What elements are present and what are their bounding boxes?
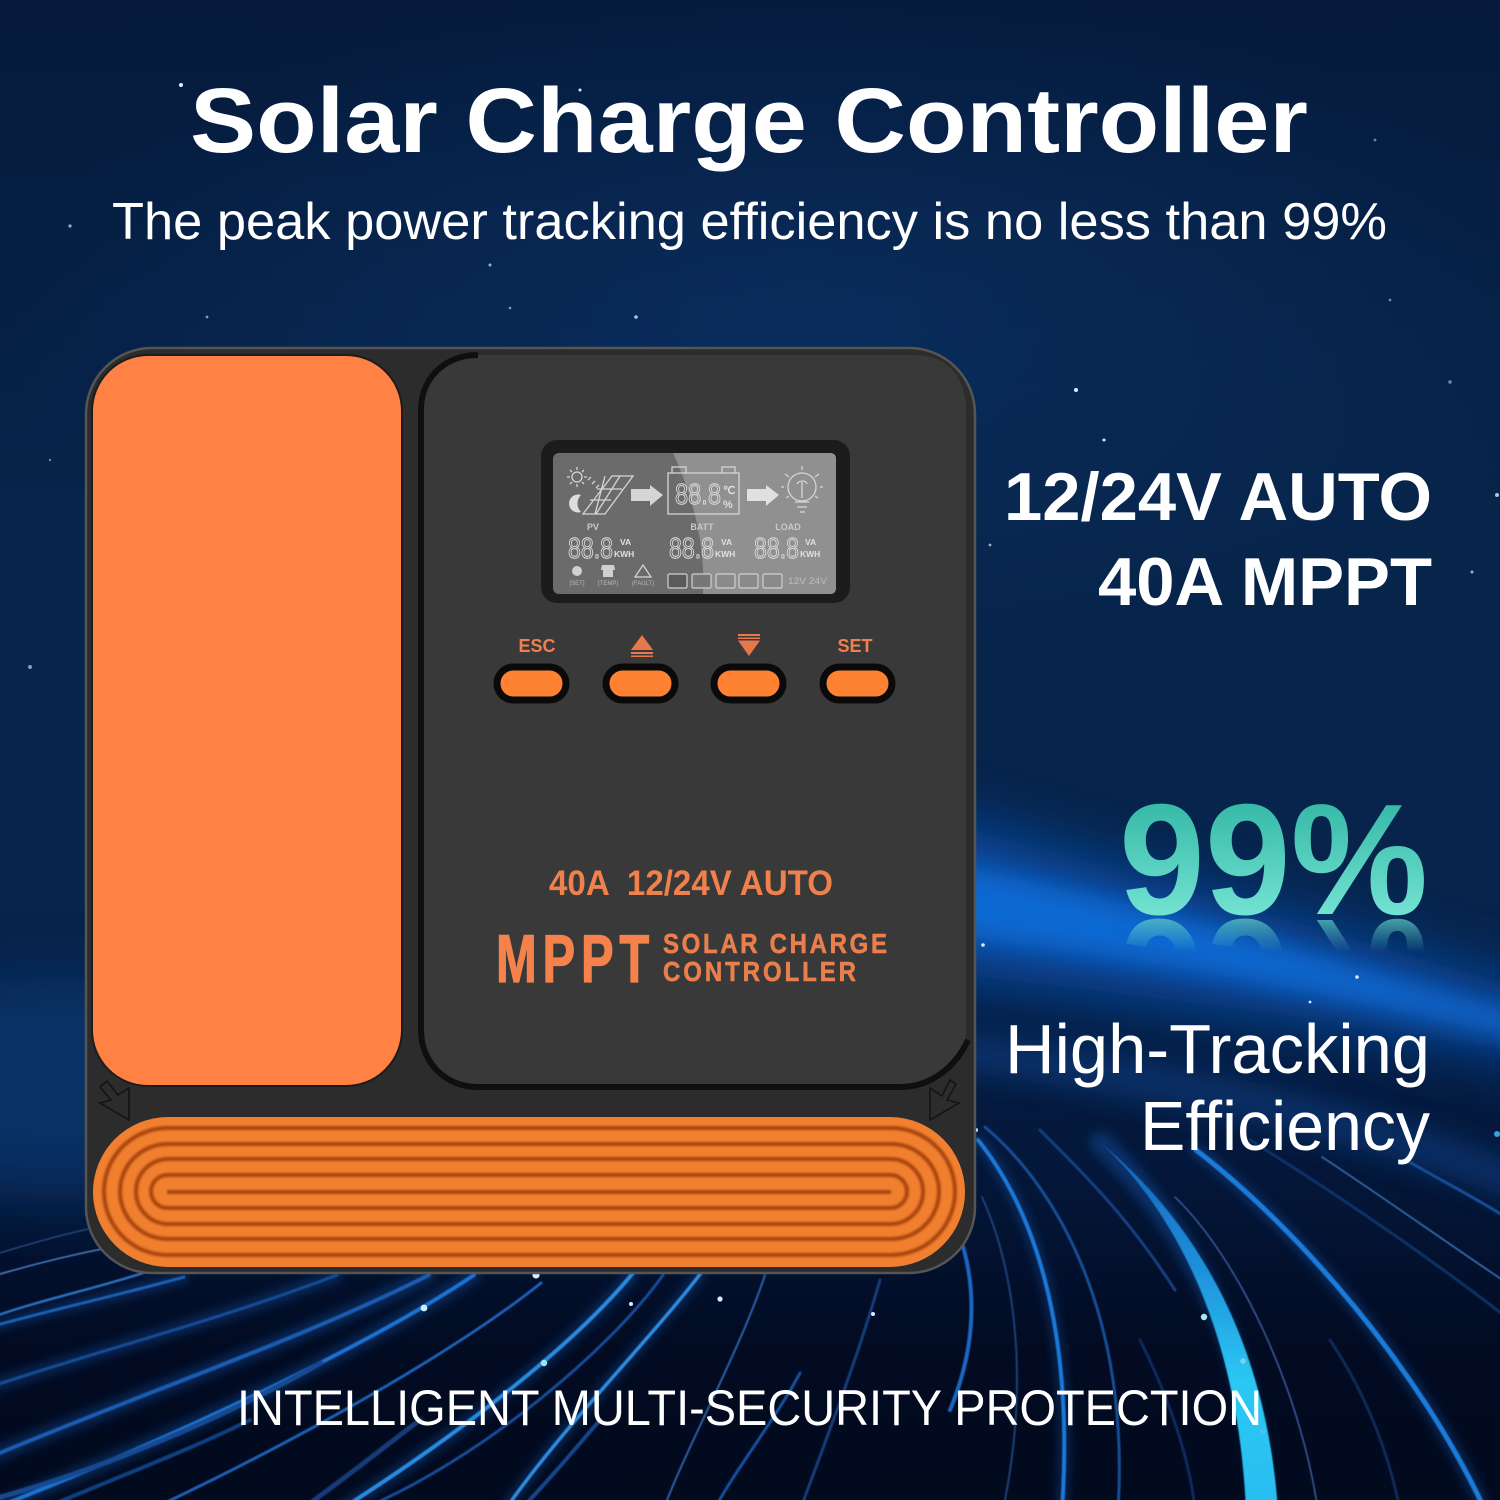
title: Solar Charge Controller — [190, 70, 1308, 172]
background: soft glow under streaks — [0, 1140, 1485, 1500]
device label: solar charge controller: SOLAR CHARGE — [663, 930, 887, 959]
button labels: SET — [837, 636, 873, 656]
LCD status labels: (FAULT) — [632, 581, 654, 587]
spec text: voltage: 12/24V AUTO — [1004, 459, 1432, 535]
caption: high-tracking efficiency: High-Tracking — [1005, 1010, 1430, 1088]
LCD temperature and percent: % — [723, 499, 733, 511]
device label: MPPT: MPPT — [496, 920, 655, 997]
LCD labels — [587, 522, 801, 532]
LCD readouts: 88.8 — [754, 533, 799, 565]
99% reflection: 99% — [1119, 886, 1428, 1062]
LCD battery type icons — [668, 574, 782, 588]
product: solar charge controller — [86, 348, 975, 1273]
LCD icon row: sun, panel, arrow, battery, arrow, bulb — [567, 466, 823, 514]
LCD units: VA — [721, 537, 732, 547]
LCD status labels: [SET] — [569, 581, 585, 587]
button labels — [518, 634, 873, 657]
LCD readouts: 88.8 — [669, 533, 714, 565]
LCD status labels — [569, 581, 654, 587]
big 99% figure: 99% — [1119, 772, 1428, 948]
LCD status labels: (TEMP) — [598, 581, 618, 587]
LCD labels: LOAD — [775, 522, 801, 532]
subtitle: The peak power tracking efficiency is no less than 99% — [112, 193, 1387, 251]
LCD labels: PV — [587, 522, 599, 532]
LCD readouts: 88.8 — [568, 533, 613, 565]
LCD units — [614, 537, 820, 559]
orange side panel — [92, 355, 402, 1086]
icon: left arrow mark — [100, 1081, 129, 1120]
LCD units: KWH — [614, 549, 634, 559]
footer text: INTELLIGENT MULTI-SECURITY PROTECTION — [237, 1380, 1262, 1436]
LCD labels: BATT — [690, 522, 714, 532]
device label: solar charge controller: CONTROLLER — [663, 958, 856, 987]
LCD status icons — [572, 565, 651, 577]
device label: solar charge controller — [663, 930, 887, 987]
LCD units: VA — [805, 537, 816, 547]
LCD units: VA — [620, 537, 631, 547]
LCD units: KWH — [715, 549, 735, 559]
device label: rating: 40A 12/24V AUTO — [549, 864, 833, 903]
LCD readouts — [568, 533, 799, 565]
LCD battery readout: 88.8 — [675, 479, 721, 511]
LCD units: KWH — [800, 549, 820, 559]
LCD temperature and percent: ℃ — [723, 485, 735, 497]
LCD temperature and percent — [723, 485, 735, 511]
LCD display — [541, 440, 850, 603]
spec text: current: 40A MPPT — [1098, 544, 1432, 620]
button labels: ESC — [518, 636, 556, 656]
LCD voltage indicators: 12V 24V — [788, 576, 828, 587]
controller body — [86, 348, 975, 1273]
front faceplate — [421, 355, 968, 1087]
caption: high-tracking efficiency — [1005, 1010, 1430, 1165]
buttons — [497, 667, 892, 700]
ribbed orange rubber pad — [93, 1117, 965, 1267]
background: curved light streaks — [0, 1127, 1500, 1500]
icon: right arrow mark — [930, 1080, 959, 1120]
caption: high-tracking efficiency: Efficiency — [1140, 1087, 1430, 1165]
